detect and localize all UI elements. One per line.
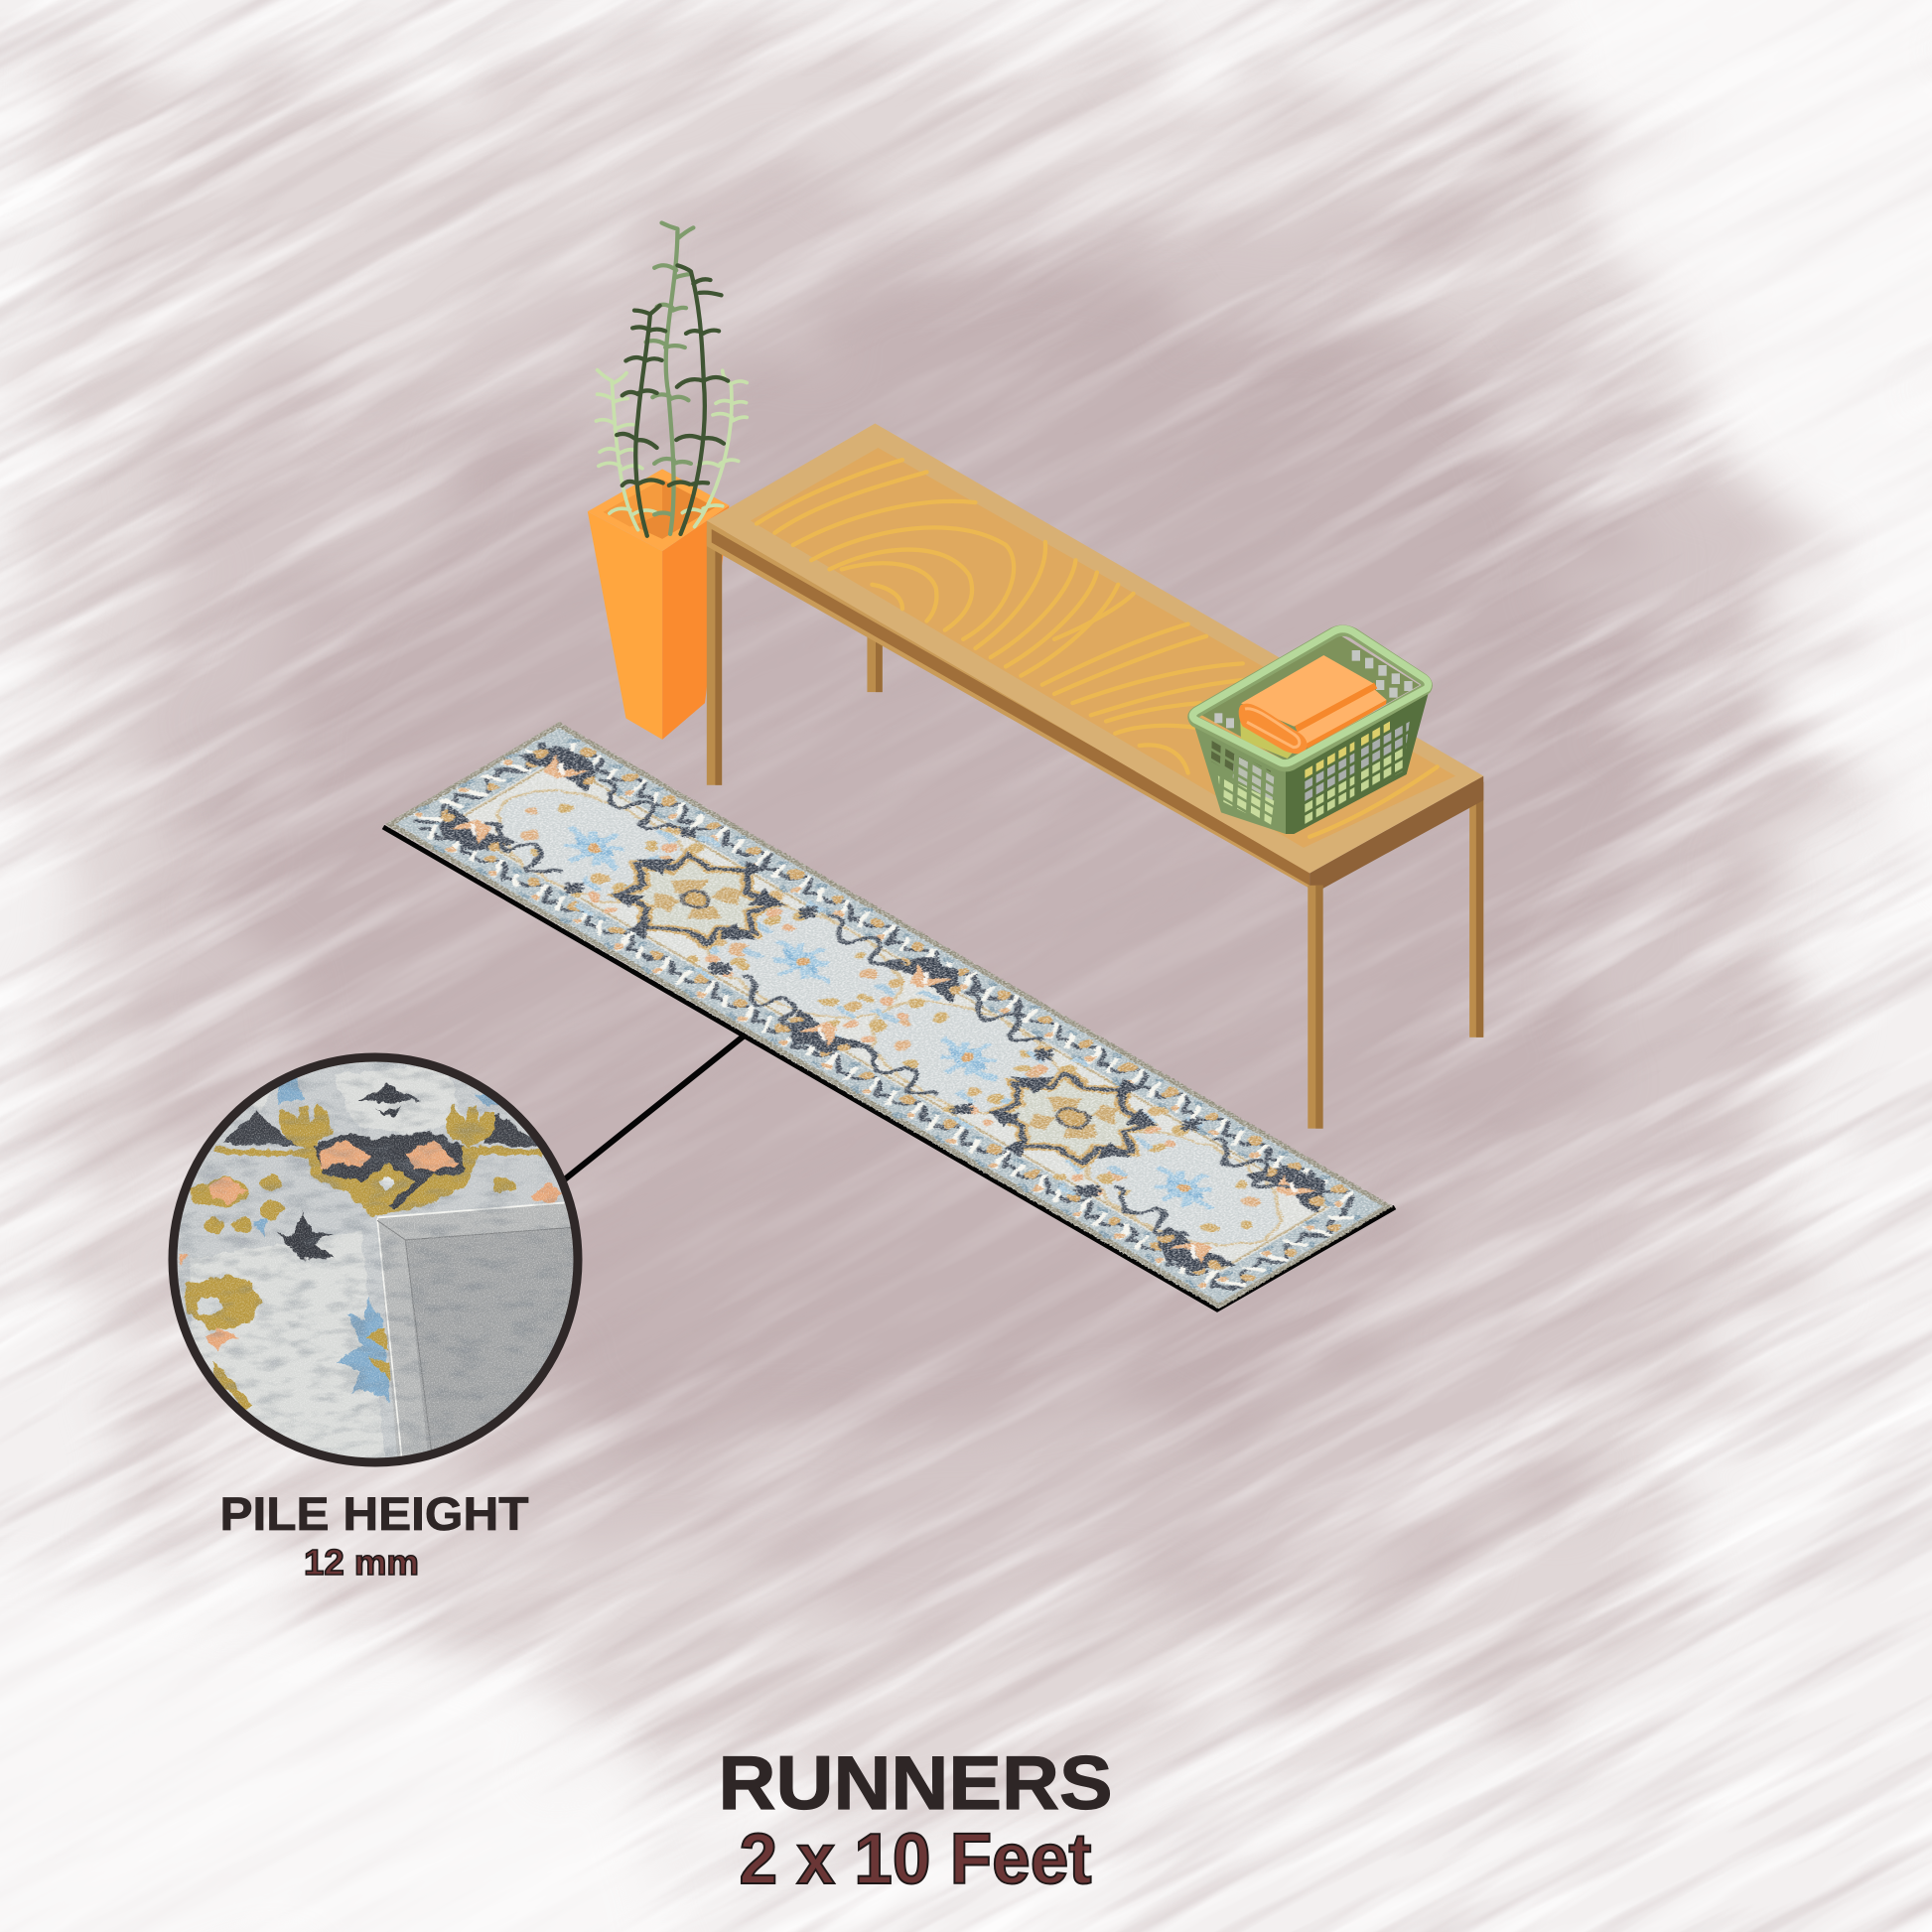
basket rim: [1193, 630, 1427, 766]
icon: plant stems: [596, 222, 747, 536]
front leg: [1308, 886, 1323, 1129]
title: runners: RUNNERS: [719, 1741, 1112, 1826]
ovals: [452, 761, 1328, 1272]
right leg: [1469, 782, 1483, 1037]
medallions: [553, 817, 1213, 1201]
leader line: [561, 1035, 746, 1182]
table top: [707, 424, 1483, 889]
left leg: [707, 533, 722, 785]
basket left face: [1192, 718, 1286, 834]
detail lens: rug corner close-up: [169, 1052, 582, 1467]
lens: dark corner bands: [221, 1111, 543, 1146]
lens: central medallion: [305, 1139, 480, 1218]
rug shadow edge: [383, 827, 1395, 1310]
back holes: [1214, 650, 1413, 728]
lens: mottled pile shading: [169, 1052, 586, 1469]
lens: face of pile: [177, 1062, 564, 1457]
table: [707, 424, 1483, 1129]
lens: dark bird motifs: [278, 1084, 422, 1258]
lens: gold antlers: [278, 1103, 496, 1150]
runner rug with medallion pattern: [385, 722, 1393, 1309]
lens: dark ring: [173, 1057, 578, 1462]
knot and squiggle motifs: [409, 735, 1350, 1283]
towel: folded orange stack: [1239, 655, 1387, 754]
label: 12 mm: 12 mm: [304, 1542, 419, 1583]
basket right face: [1286, 688, 1430, 834]
basket with towels: [1192, 628, 1430, 834]
label: pile height: PILE HEIGHT: [220, 1487, 529, 1540]
basket back wall: [1201, 635, 1420, 761]
lens: blue star: [255, 1078, 506, 1401]
rug field: [385, 722, 1393, 1309]
lens: rug backing: [377, 1202, 593, 1493]
back leg: [867, 624, 883, 692]
wood grain: [757, 460, 1438, 837]
lens: pile field: [177, 1062, 564, 1457]
icon: orange pot: [588, 469, 729, 740]
lens: fine pile noise: [169, 1052, 586, 1469]
plant pot and plant: [588, 222, 747, 740]
lens: gold and peach flowers: [192, 1176, 246, 1208]
towel: lower yellow layer: [1240, 722, 1294, 759]
rug border: [390, 725, 1388, 1306]
subtitle: size: 2 x 10 Feet: [739, 1820, 1092, 1899]
